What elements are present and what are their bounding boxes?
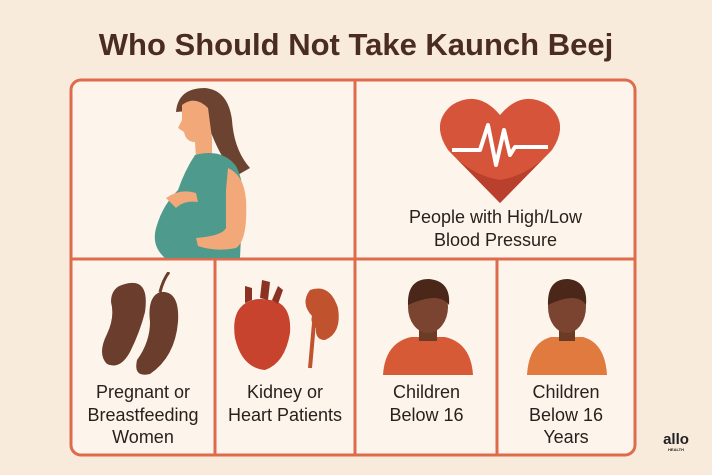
icon: heart and kidney — [234, 280, 339, 370]
text: children below 16: Children — [393, 382, 460, 402]
text: children below 16 — [389, 382, 464, 424]
text: children below 16 years — [529, 382, 603, 447]
icon: child 1 — [383, 279, 473, 375]
hand on belly — [166, 191, 198, 208]
text: children below 16 years: Years — [543, 427, 589, 447]
icon: child 2 — [527, 279, 607, 375]
icon: beans — [102, 272, 178, 375]
text: children below 16 years: Children — [532, 382, 600, 402]
text: blood pressure: People with High/Low — [409, 207, 582, 227]
hair — [176, 88, 250, 176]
face/neck — [178, 101, 212, 158]
text: children below 16: Below 16 — [389, 404, 464, 424]
text: blood pressure: Blood Pressure — [434, 230, 557, 250]
text: blood pressure — [409, 207, 582, 250]
text: pregnant: Pregnant or — [96, 382, 190, 402]
text: kidney/heart: Kidney or — [247, 382, 323, 402]
text: children below 16 years: Below 16 — [529, 404, 603, 424]
text: pregnant: Breastfeeding — [87, 404, 199, 424]
arm — [196, 168, 246, 250]
logo: HEALTH — [668, 447, 684, 452]
text: pregnant: Women — [112, 427, 174, 447]
title: Who Should Not Take Kaunch Beej — [99, 27, 613, 62]
text: kidney/heart — [228, 382, 342, 424]
shirt/belly — [155, 153, 243, 258]
icon: pregnant woman — [154, 88, 250, 258]
text: kidney/heart: Heart Patients — [228, 404, 342, 424]
logo: allo — [663, 431, 689, 448]
icon: heart with pulse — [440, 98, 560, 203]
text: pregnant — [87, 382, 199, 447]
